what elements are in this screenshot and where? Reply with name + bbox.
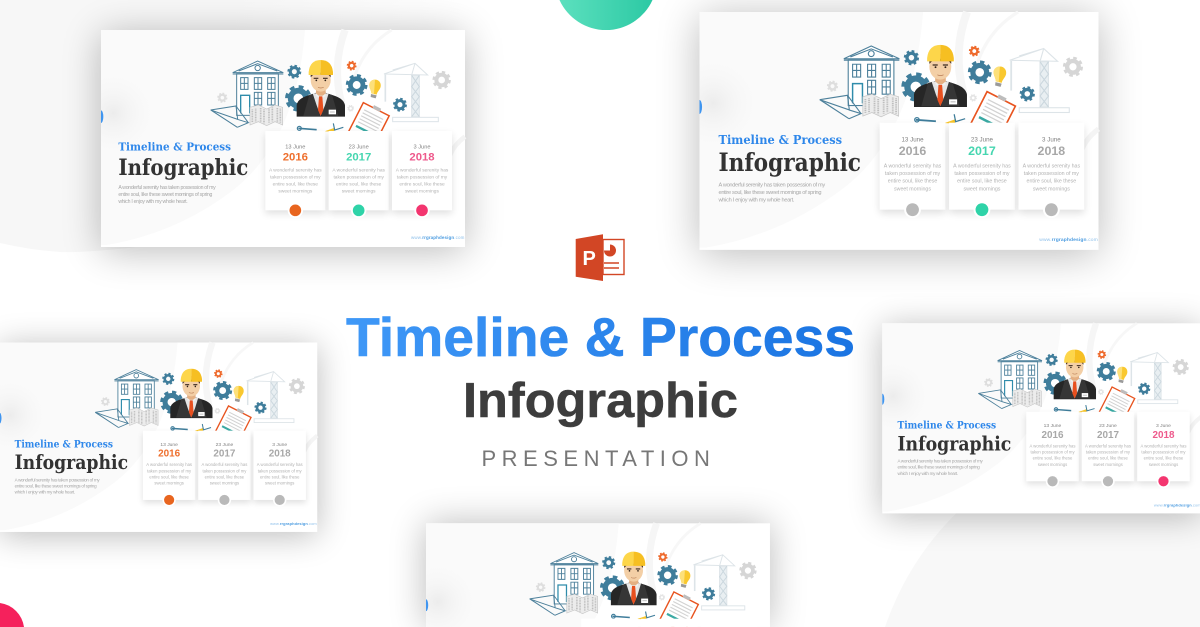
card: 2017: 2017 (1097, 430, 1119, 441)
intro text: A wonderful serenity has taken possession of my (718, 182, 825, 188)
card: 2018: 3 June (1042, 137, 1061, 144)
heading: Timeline & Process (118, 139, 231, 153)
card: 2017: entire soul, like these (1088, 456, 1128, 461)
card: 2018: sweet mornings (1033, 186, 1070, 192)
footer website: www.rrgraphdesign.com (270, 521, 317, 526)
card: 2017: sweet mornings (1093, 462, 1123, 467)
card: 2017: entire soul, like these (336, 182, 382, 188)
card: 2016: 13 June (285, 144, 305, 150)
card: 2016 (265, 131, 325, 218)
card: 2018 (1018, 123, 1084, 218)
slide: middle left, 2016 highlighted (0, 342, 317, 535)
card: 2016 (143, 431, 195, 507)
heading: Infographic (897, 431, 1011, 455)
slide: top left, all years coloured (101, 30, 465, 251)
illustration: construction engineer (820, 45, 1082, 139)
intro text: entire soul, like these sweet mornings of spring (897, 465, 980, 470)
intro text: A wonderful serenity has taken possession of my (897, 459, 983, 464)
card: 2017: sweet mornings (210, 481, 239, 486)
card: 2016: entire soul, like these (273, 182, 318, 188)
card: 2017: A wonderful serenity has (202, 462, 247, 467)
card: 2017 (949, 123, 1015, 218)
card: 2016: sweet mornings (278, 189, 313, 195)
card: 2018: entire soul, like these (1027, 179, 1076, 185)
card: 2017 (1082, 412, 1134, 488)
card: 2017: 23 June (216, 442, 233, 448)
intro text: A wonderful serenity has taken possession of my (118, 185, 216, 191)
illustration: construction engineer (530, 552, 755, 627)
card: 2018: sweet mornings (405, 189, 439, 195)
cropped card tops (581, 619, 758, 627)
card: 2017: sweet mornings (342, 189, 376, 195)
card: 2018: 2018 (1152, 430, 1175, 441)
card: 2016: taken possession of my (885, 171, 940, 177)
card: 2018: sweet mornings (1149, 462, 1178, 467)
card: 2018: entire soul, like these (260, 474, 300, 479)
card: 2018: 3 June (272, 442, 287, 448)
card: 2017: entire soul, like these (205, 474, 245, 479)
intro text (897, 459, 983, 476)
intro text: which I enjoy with my whole heart. (118, 199, 188, 205)
intro text: entire soul, like these sweet mornings of spring (15, 483, 97, 488)
card: 2018: taken possession of my (1141, 450, 1186, 455)
card: 2018: A wonderful serenity has (396, 168, 449, 174)
card: 2017: 2017 (213, 449, 236, 460)
card: 2017 (198, 431, 251, 507)
card: 2017: taken possession of my (1086, 450, 1131, 455)
card: 2016: sweet mornings (894, 186, 931, 192)
card: 2016: A wonderful serenity has (146, 462, 192, 467)
heading: Infographic (15, 450, 128, 474)
card: 2017: A wonderful serenity has (1085, 443, 1131, 448)
card: 2016: A wonderful serenity has (1030, 443, 1075, 448)
heading (897, 421, 1011, 455)
decorative pink circle (0, 603, 24, 627)
card: 2018: entire soul, like these (399, 182, 445, 188)
heading: Timeline & Process (897, 421, 997, 432)
card: 2018 (254, 431, 306, 507)
card: 2017: taken possession of my (954, 171, 1010, 177)
intro text: entire soul, like these sweet mornings of spring (718, 190, 822, 196)
footer website: www.rrgraphdesign.com (411, 235, 465, 240)
card: 2017: 23 June (349, 144, 369, 150)
heading: Timeline & Process (15, 440, 113, 451)
title: Infographic (463, 374, 738, 428)
intro text: A wonderful serenity has taken possession of my (15, 477, 100, 482)
card: 2018: A wonderful serenity has (1140, 443, 1186, 448)
card: 2016: taken possession of my (1030, 450, 1075, 455)
icon: PowerPoint logo: P (582, 248, 596, 270)
card: 2017: taken possession of my (202, 468, 247, 473)
slide: middle right, 2018 highlighted (882, 323, 1200, 517)
heading: Infographic (118, 155, 248, 181)
intro text (717, 182, 825, 204)
card: 2016: 2016 (1041, 430, 1064, 441)
card: 2016: 2016 (283, 152, 308, 164)
card: 2016: entire soul, like these (1033, 456, 1073, 461)
card: 2017: entire soul, like these (957, 179, 1007, 185)
footer website: www.rrgraphdesign.com (1154, 502, 1200, 507)
icon: PowerPoint logo (576, 234, 624, 281)
card: 2016: taken possession of my (147, 468, 192, 473)
card: 2018: taken possession of my (258, 468, 303, 473)
heading (118, 139, 248, 181)
card: 2017: sweet mornings (963, 186, 1001, 192)
intro text (118, 185, 216, 205)
card: 2016: entire soul, like these (149, 474, 190, 479)
heading (15, 440, 128, 474)
card: 2016: entire soul, like these (888, 179, 937, 185)
card: 2016 (880, 123, 945, 218)
title: Timeline & Process (346, 306, 855, 368)
card: 2018: A wonderful serenity has (1023, 163, 1081, 169)
heading (718, 132, 861, 177)
card: 2018 (392, 131, 452, 218)
card: 2016: 13 June (160, 442, 178, 448)
heading: Timeline & Process (718, 132, 842, 147)
intro text: which I enjoy with my whole heart. (15, 490, 75, 495)
card: 2017: 2017 (968, 144, 996, 158)
title (346, 306, 855, 471)
card: 2018: 2018 (409, 152, 435, 164)
heading: Infographic (718, 148, 861, 177)
card: 2017: A wonderful serenity has (953, 163, 1011, 169)
card: 2018: A wonderful serenity has (257, 462, 303, 467)
card: 2018: 2018 (1038, 144, 1065, 158)
card: 2016 (1026, 412, 1079, 488)
card: 2016: 13 June (1044, 423, 1062, 429)
card: 2018: taken possession of my (397, 175, 448, 181)
intro text (15, 477, 100, 495)
card: 2016: sweet mornings (1038, 462, 1067, 467)
card: 2017 (329, 131, 389, 218)
card: 2018: sweet mornings (265, 481, 294, 486)
card: 2016: 13 June (901, 137, 924, 144)
card: 2017: 23 June (1099, 423, 1117, 429)
card: 2018: taken possession of my (1024, 171, 1079, 177)
slide: top right, 2017 highlighted (699, 12, 1099, 254)
card: 2017: 23 June (971, 137, 994, 144)
decorative teal circle (560, 0, 652, 30)
card: 2016: 2016 (899, 144, 926, 158)
card: 2017: 2017 (346, 152, 371, 164)
illustration: construction engineer (211, 60, 449, 146)
card: 2018: entire soul, like these (1144, 456, 1184, 461)
card: 2018: 3 June (414, 144, 430, 150)
card: 2018 (1137, 412, 1190, 488)
intro text: which I enjoy with my whole heart. (717, 198, 795, 204)
illustration: construction engineer (978, 350, 1188, 425)
card: 2016: 2016 (158, 449, 181, 460)
intro text: which I enjoy with my whole heart. (897, 471, 958, 476)
card: 2017: A wonderful serenity has (332, 168, 386, 174)
card: 2018: 2018 (269, 449, 291, 460)
title: PRESENTATION (482, 446, 715, 471)
card: 2018: 3 June (1156, 423, 1171, 429)
intro text: entire soul, like these sweet mornings of spring (118, 192, 212, 198)
card: 2016: taken possession of my (270, 175, 321, 181)
footer website: www.rrgraphdesign.com (1039, 237, 1098, 243)
card: 2016: A wonderful serenity has (269, 168, 322, 174)
illustration: construction engineer (95, 369, 304, 443)
slide: bottom centre, cropped by the page edge (426, 523, 770, 627)
card: 2016: sweet mornings (154, 481, 184, 486)
card: 2016: A wonderful serenity has (884, 163, 942, 169)
card: 2017: taken possession of my (333, 175, 384, 181)
